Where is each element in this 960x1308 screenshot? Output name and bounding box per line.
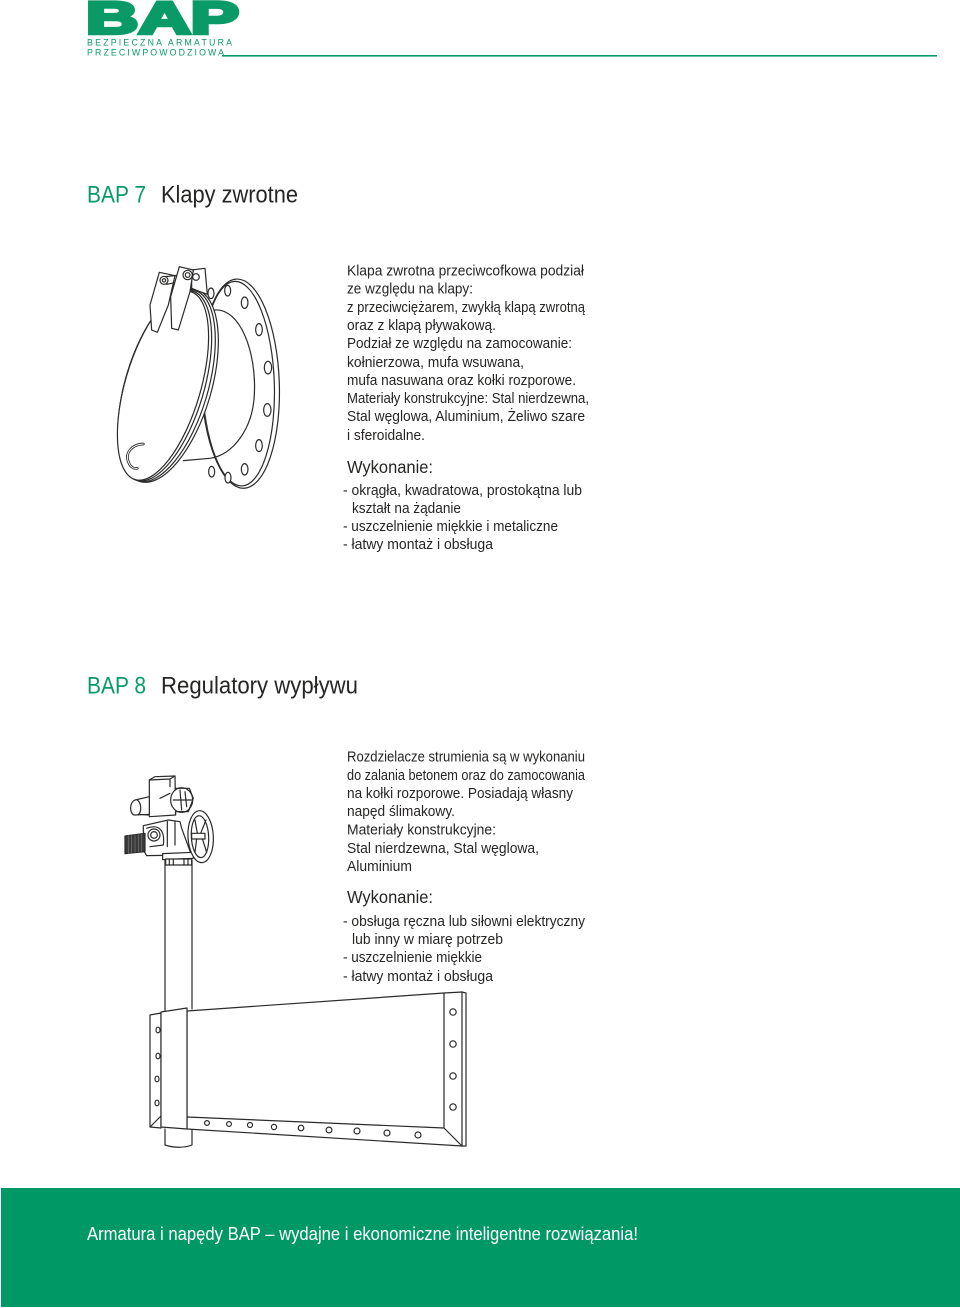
text block: flap description: kołnierzowa, mufa wsuwana,	[347, 355, 524, 371]
text block: regulator description: Materiały konstrukcyjne:	[347, 822, 496, 838]
text block: flap execution: - okrągła, kwadratowa, prostokątna lub	[343, 483, 582, 499]
text block: regulator execution: - uszczelnienie miękkie	[343, 950, 482, 966]
logo: BAP: PRZECIWPOWODZIOWA	[87, 48, 224, 58]
logo: BAP: BEZPIECZNA ARMATURA	[87, 38, 232, 48]
text block: regulator description: Stal nierdzewna, Stal węglowa,	[347, 841, 539, 857]
text block: flap description: mufa nasuwana oraz kołki rozporowe.	[347, 373, 576, 389]
heading: BAP 8 Regulatory wypływu: Regulatory wypływu	[161, 672, 358, 700]
heading: BAP 7 Klapy zwrotne: BAP 7	[87, 182, 146, 208]
text block: flap description: z przeciwciężarem, zwykłą klapą zwrotną	[347, 300, 586, 316]
text block: regulator description: napęd ślimakowy.	[347, 804, 455, 820]
heading: BAP 8 Regulatory wypływu: BAP 8	[87, 672, 146, 700]
heading: BAP 8 Regulatory wypływu	[87, 672, 358, 700]
footer band with slogan	[1, 1188, 960, 1307]
illustration: flow regulator with actuator	[125, 776, 466, 1147]
text block: flap description: Podział ze względu na zamocowanie:	[347, 336, 572, 352]
text block: flap description: ze względu na klapy:	[347, 282, 473, 298]
text block: flap description: Stal węglowa, Aluminium, Żeliwo szare	[347, 407, 585, 425]
text block: regulator description: na kołki rozporowe. Posiadają własny	[347, 786, 574, 802]
text block: regulator execution: Wykonanie:	[347, 887, 433, 907]
text block: regulator execution: - łatwy montaż i obsługa	[343, 969, 494, 985]
illustration: check flap valve	[99, 267, 283, 494]
heading: BAP 7 Klapy zwrotne: Klapy zwrotne	[161, 182, 298, 208]
text block: flap description	[347, 264, 589, 444]
text block: flap description: Materiały konstrukcyjne: Stal nierdzewna,	[347, 391, 589, 407]
heading: BAP 7 Klapy zwrotne	[87, 182, 298, 208]
text block: regulator description: Rozdzielacze strumienia są w wykonaniu	[347, 750, 585, 766]
text block: regulator description: do zalania betonem oraz do zamocowania	[347, 768, 586, 784]
text block: flap execution	[343, 457, 582, 553]
text block: flap execution: - łatwy montaż i obsługa	[343, 537, 494, 553]
text block: regulator description	[347, 750, 586, 875]
text block: flap execution: - uszczelnienie miękkie i metaliczne	[343, 519, 558, 535]
text block: flap execution: Wykonanie:	[347, 457, 433, 477]
logo: BAP	[86, 0, 239, 58]
text block: regulator execution: - obsługa ręczna lub siłowni elektryczny	[343, 914, 586, 930]
text block: regulator execution: lub inny w miarę potrzeb	[352, 932, 503, 948]
text block: flap execution: kształt na żądanie	[352, 501, 461, 517]
text block: flap description: oraz z klapą pływakową.	[347, 318, 496, 334]
text block: flap description: Klapa zwrotna przeciwcofkowa podział	[347, 264, 585, 280]
text block: flap description: i sferoidalne.	[347, 428, 425, 444]
footer band with slogan: Armatura i napędy BAP – wydajne i ekonomiczne inteligentne rozwiązania!	[87, 1223, 638, 1244]
text block: regulator execution	[343, 887, 586, 985]
text block: regulator description: Aluminium	[347, 859, 412, 875]
